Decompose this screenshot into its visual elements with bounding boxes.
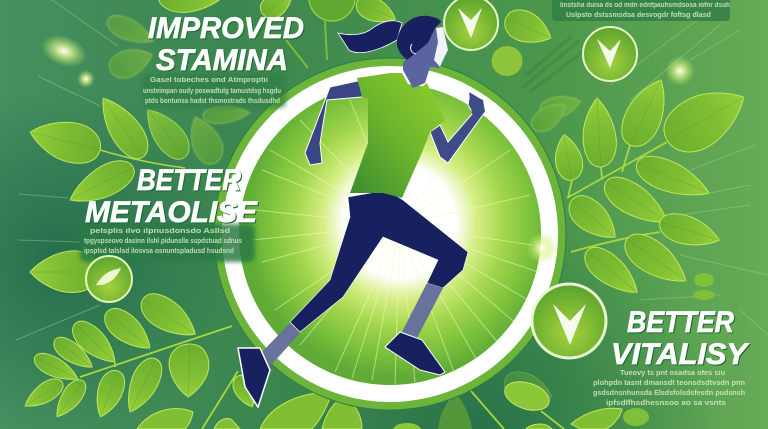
- text block: better metabolise: pelsplis ilvo ilpnusdonsdo Asllsd: [90, 228, 230, 235]
- stem: [100, 150, 185, 168]
- outer ring: [214, 58, 566, 410]
- ponytail: [338, 21, 402, 53]
- text block: better vitalisy: gsdsdnsnhunsda Elsdsfolsdsfesdn pudsnsh: [593, 390, 745, 397]
- badge: upper right check: [583, 27, 637, 81]
- leaf branch: right: [492, 4, 756, 303]
- front shoe: [385, 332, 445, 375]
- text block: better vitalisy: ipfsdlfhsdhesnsoo ao sa vsnts: [606, 400, 726, 407]
- white ring: [222, 66, 558, 402]
- left arm: [305, 80, 362, 165]
- text block: improved stamina: unsteimpan oudy poswadtulg tamustdsg hsgdu: [143, 88, 281, 95]
- back shoe: [238, 348, 270, 407]
- text panel: better metabolise: [80, 224, 255, 262]
- text block: better metabolise: tpgyspseovo dasinn ilshl pidunslla sspdstuad sdnus: [84, 238, 242, 245]
- ear: [411, 44, 416, 54]
- hair: [397, 16, 441, 60]
- text panel: top right: [552, 0, 730, 21]
- shirt: [350, 73, 445, 198]
- central circle: [214, 58, 566, 410]
- dim background foliage: top left: [104, 11, 250, 169]
- heading: better metabolise: METAOLISE: [85, 196, 258, 229]
- text block: improved stamina: [143, 77, 281, 105]
- badge: left leaf: [86, 256, 132, 302]
- leaves: [20, 251, 261, 429]
- sun rays: [252, 100, 538, 384]
- leaves: bottom centre: [260, 367, 564, 429]
- back shin: [262, 323, 300, 368]
- small buds: right: [693, 273, 715, 300]
- inner disc: [239, 83, 541, 385]
- text block: better vitalisy: [593, 370, 745, 407]
- stem: [80, 326, 238, 429]
- hand: [469, 92, 485, 114]
- heading: improved stamina: IMPROVED: [148, 12, 304, 45]
- text block: top right: linstsha duisa ds od mdn ednfpauhsmdsosa iofnr dsuh: [560, 2, 730, 9]
- runner: [238, 16, 485, 407]
- text block: top right: [560, 2, 730, 19]
- badge: lower right check: [532, 284, 606, 358]
- front shin: [402, 283, 443, 338]
- text block: improved stamina: Gasel tobeches ond Atmproptii: [150, 77, 268, 84]
- face highlight: [434, 27, 448, 67]
- leaf branch: lower left: [20, 251, 261, 429]
- text block: improved stamina: ptds bontunsa hadst thsmostrads thsdusdhd: [145, 98, 280, 105]
- buds and leaf: bottom right: [393, 377, 649, 429]
- text panel: improved stamina: [142, 74, 286, 108]
- text block: better metabolise: [84, 228, 242, 255]
- leaves: [25, 0, 400, 213]
- top bud: [286, 0, 355, 68]
- heading: improved stamina: [148, 12, 304, 77]
- dim foliage: top right: [522, 36, 585, 137]
- background light streaks: [16, 0, 768, 340]
- leaf cluster: top left: [25, 0, 400, 213]
- glow lights: [36, 29, 695, 264]
- text block: top right: Uslpsto dstssmsdsa desvogdr foftsg dlasd: [566, 12, 711, 19]
- text block: better vitalisy: plohpdn tasnt dmansdt teonsdsdtvsdn pnn: [593, 380, 745, 387]
- back leg and hips: [290, 190, 468, 332]
- badge: top check: [444, 0, 498, 50]
- heading: better metabolise: BETTER: [137, 164, 241, 197]
- text block: better vitalisy: Tueovy ts pnt osadsa ofes siu: [620, 370, 725, 377]
- text block: better metabolise: ipsplsd talslsd ilosvsa osnuntspladusd hsudsnd: [84, 248, 234, 255]
- leaves: [492, 4, 756, 303]
- heading: better metabolise: [85, 164, 258, 229]
- heading: better vitalisy: [611, 306, 750, 371]
- neck and face: [403, 27, 448, 88]
- heading: better vitalisy: BETTER: [627, 306, 734, 339]
- right arm: [430, 92, 485, 163]
- heading: improved stamina: STAMINA: [156, 44, 288, 77]
- heading: better vitalisy: VITALISY: [611, 338, 750, 371]
- stem: [567, 142, 667, 252]
